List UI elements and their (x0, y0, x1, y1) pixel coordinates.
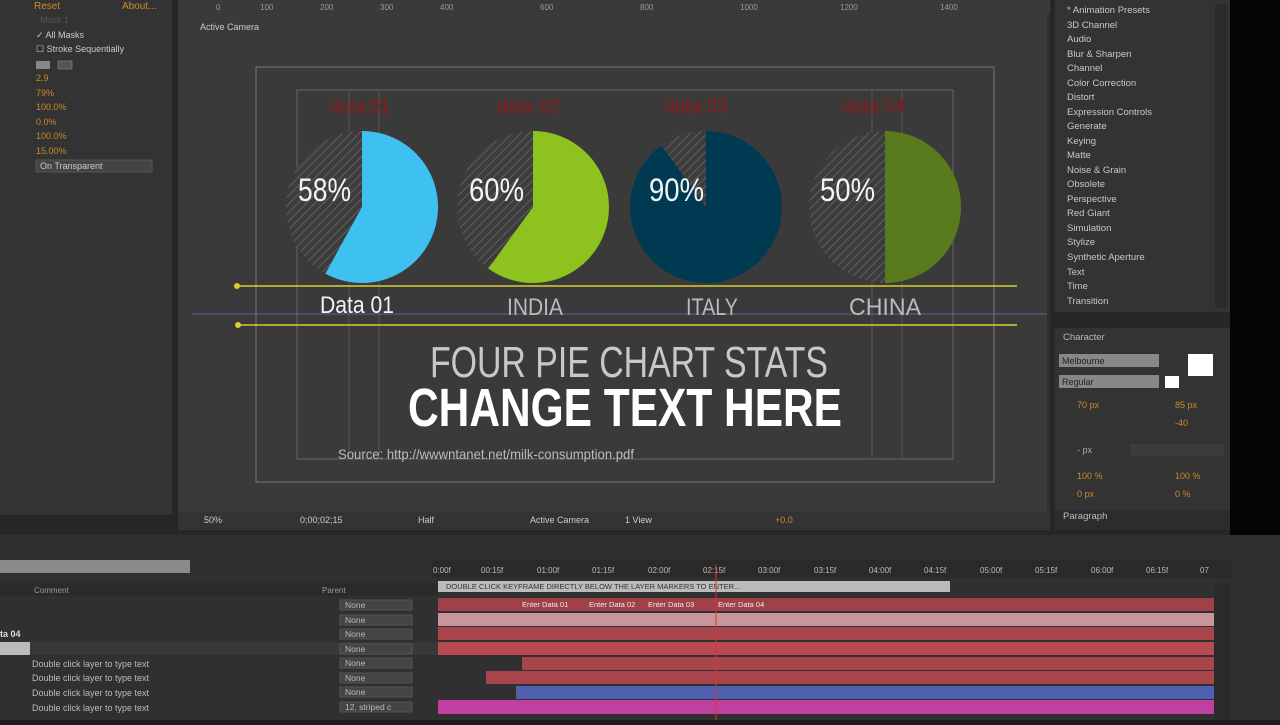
panel: composition viewer: 300 (380, 3, 394, 12)
chart: pie 1: data 01 (330, 96, 390, 118)
chart: pie 4 (809, 96, 961, 283)
panel: effects list: 3D Channel (1067, 20, 1117, 31)
chart: pie 3 (630, 96, 782, 283)
panel: effects list: Stylize (1067, 237, 1095, 248)
panel: character: 0 % (1175, 489, 1191, 499)
source text: Source: http://wwwntanet.net/milk-consumption.pdf (338, 446, 634, 462)
panel: effects list: Distort (1067, 92, 1095, 103)
panel: timeline: None (345, 673, 366, 683)
panel: character: 100 % (1175, 471, 1201, 481)
chart: pie 3: data 03 (664, 96, 728, 118)
panel: composition viewer: Active Camera (200, 22, 259, 32)
panel: effects list: Channel (1067, 63, 1102, 74)
panel: composition viewer: 800 (640, 3, 654, 12)
panel: timeline: 02:00f (648, 566, 671, 575)
pie labels (320, 292, 921, 321)
panel: effect controls (left): On Transparent (40, 161, 103, 171)
panel: effect controls (left): 2.9 (36, 73, 49, 83)
panel: effect controls (left): 100.0% (36, 131, 67, 141)
panel: timeline: None (345, 600, 366, 610)
chart: pie 2: data 02 (497, 96, 560, 118)
panel: character: 70 px (1077, 400, 1100, 410)
panel: effects list: Perspective (1067, 194, 1117, 205)
panel: effect controls (left): Reset (34, 1, 60, 12)
panel: effects list: Matte (1067, 150, 1091, 161)
panel: timeline: Double click layer to type text (32, 659, 150, 669)
panel: timeline: 01:15f (592, 566, 615, 575)
panel: timeline: 01:00f (537, 566, 560, 575)
panel: timeline (0, 535, 1280, 720)
panel: composition viewer: +0.0 (775, 515, 793, 525)
panel: effects list (1055, 0, 1230, 312)
panel: effect controls (left): 79% (36, 88, 54, 98)
panel: timeline: DOUBLE CLICK KEYFRAME DIRECTLY BELOW THE LAYER MARKERS TO ENTER... (446, 582, 740, 591)
panel: character (1055, 328, 1230, 530)
panel: timeline: 12. striped c (345, 702, 392, 712)
panel: timeline: None (345, 658, 366, 668)
panel: composition viewer: 100 (260, 3, 274, 12)
panel: timeline: 05:15f (1035, 566, 1058, 575)
panel: timeline: 00:15f (481, 566, 504, 575)
panel: timeline: 07 (1200, 566, 1209, 575)
panel: timeline: Enter Data 04 (718, 600, 764, 609)
panel: composition viewer: 50% (204, 515, 222, 525)
panel: timeline: 05:00f (980, 566, 1003, 575)
panel: character: 100 % (1077, 471, 1103, 481)
panel: timeline: Double click layer to type text (32, 673, 150, 683)
pie labels: CHINA (849, 294, 921, 321)
panel: timeline: None (345, 687, 366, 697)
panel: composition viewer: 600 (540, 3, 554, 12)
chart: pie 1 (286, 96, 438, 283)
panel: timeline: 03:00f (758, 566, 781, 575)
panel: effects list: Synthetic Aperture (1067, 252, 1145, 263)
panel: timeline: 06:00f (1091, 566, 1114, 575)
panel: timeline: None (345, 644, 366, 654)
chart: pie 4: data 04 (842, 96, 905, 118)
panel: composition viewer: 0;00;02;15 (300, 515, 343, 525)
panel: effect controls (left): ☐ Stroke Sequentially (36, 44, 125, 54)
title: CHANGE TEXT HERE (408, 378, 842, 438)
panel: timeline: 04:00f (869, 566, 892, 575)
panel: character: Character (1063, 332, 1105, 343)
panel: composition viewer: 1000 (740, 3, 758, 12)
panel: effect controls (left) (0, 0, 172, 515)
panel: effects list: Obsolete (1067, 179, 1105, 190)
panel: composition viewer: 400 (440, 3, 454, 12)
panel: effects list: Text (1067, 267, 1085, 278)
panel: timeline: 0:00f (433, 566, 452, 575)
panel: timeline: Enter Data 02 (589, 600, 635, 609)
panel: effect controls (left): Mask 1 (40, 15, 69, 25)
panel: timeline: None (345, 615, 366, 625)
panel: effect controls (left): 0.0% (36, 117, 57, 127)
panel: effect controls (left): 100.0% (36, 102, 67, 112)
panel: timeline: Double click layer to type text (32, 703, 150, 713)
chart: pie 2: 60% (469, 172, 524, 208)
panel: timeline: Enter Data 01 (522, 600, 568, 609)
panel: effects list: Time (1067, 281, 1088, 292)
panel: effects list: Color Correction (1067, 78, 1136, 89)
panel: timeline: None (345, 629, 366, 639)
panel: effects list: Noise & Grain (1067, 165, 1126, 176)
panel: character: -40 (1175, 418, 1188, 428)
panel: timeline: Enter Data 03 (648, 600, 694, 609)
panel: effects list: * Animation Presets (1067, 5, 1150, 16)
panel: composition viewer: Active Camera (530, 515, 589, 525)
panel: effects list: Blur & Sharpen (1067, 49, 1131, 60)
panel: effects list: Audio (1067, 34, 1091, 45)
panel: character: 85 px (1175, 400, 1198, 410)
panel: character: Paragraph (1063, 511, 1107, 522)
title: FOUR PIE CHART STATS (430, 338, 828, 387)
chart: pie 1: 58% (298, 172, 351, 208)
panel: timeline: 04:15f (924, 566, 947, 575)
panel: effects list: Generate (1067, 121, 1107, 132)
panel: character: 0 px (1077, 489, 1095, 499)
panel: character: Melbourne (1062, 356, 1105, 366)
title (408, 338, 842, 438)
panel: composition viewer (178, 0, 1050, 530)
panel: composition viewer: Half (418, 515, 435, 525)
panel: timeline: 02:15f (703, 566, 726, 575)
panel: effect controls (left): ✓ All Masks (36, 30, 85, 40)
panel: character: - px (1077, 445, 1093, 455)
panel: composition viewer: 1400 (940, 3, 958, 12)
panel: timeline: 03:15f (814, 566, 837, 575)
panel: effect controls (left): 15.00% (36, 146, 67, 156)
panel: timeline: ta 04 (0, 629, 21, 639)
panel: effects list: Keying (1067, 136, 1096, 147)
pie labels: ITALY (686, 294, 738, 321)
panel: composition viewer: 200 (320, 3, 334, 12)
panel: composition viewer: 0 (216, 3, 221, 12)
panel: timeline: 06:15f (1146, 566, 1169, 575)
panel: effects list: Expression Controls (1067, 107, 1152, 118)
chart: pie 4: 50% (820, 172, 875, 208)
chart: pie 2 (457, 96, 609, 283)
panel: timeline: Comment (34, 586, 69, 595)
panel: effects list: Red Giant (1067, 208, 1110, 219)
panel: effects list: Transition (1067, 296, 1108, 307)
chart: pie 3: 90% (649, 172, 704, 208)
panel: timeline: Parent (322, 586, 346, 595)
panel: effect controls (left): About... (122, 1, 156, 12)
panel: composition viewer: 1 View (625, 515, 652, 525)
pie labels: Data 01 (320, 292, 394, 319)
panel: character: Regular (1062, 377, 1094, 387)
panel: composition viewer: 1200 (840, 3, 858, 12)
panel: effects list: Simulation (1067, 223, 1111, 234)
panel: timeline: Double click layer to type text (32, 688, 150, 698)
pie labels: INDIA (507, 294, 563, 321)
